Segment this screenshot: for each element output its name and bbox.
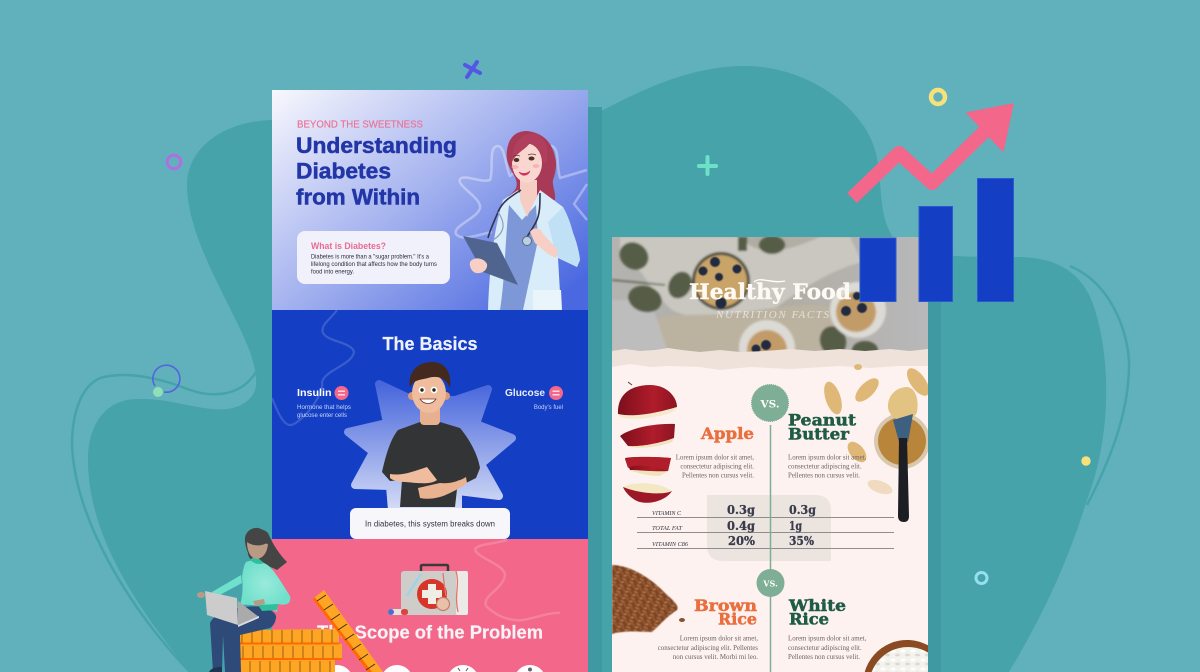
comparison table: 0.3g: [727, 503, 756, 517]
apple description: Lorem ipsum dolor sit amet,: [676, 454, 754, 462]
title: healthy food: Healthy Food: [689, 279, 851, 304]
brown rice heading: Rice: [718, 610, 757, 628]
squiggle: [475, 540, 560, 620]
white rice description: Pellentes non cursus velit.: [788, 654, 860, 661]
comparison table: [637, 495, 894, 561]
comparison table: 20%: [728, 534, 756, 548]
comparison table: 35%: [789, 534, 815, 548]
stat icons row: [324, 665, 543, 672]
what is diabetes box: Diabetes is more than a "sugar problem." It's a: [311, 254, 430, 260]
doctor illustration: [463, 131, 580, 310]
what is diabetes box: food into energy.: [311, 270, 354, 276]
hair back: [245, 529, 287, 570]
comparison table: VITAMIN C: [652, 511, 682, 517]
callout: system breaks down: In diabetes, this system breaks down: [365, 520, 495, 528]
glucose label: Glucose: [505, 387, 545, 399]
heading: the basics: The Basics: [382, 334, 478, 354]
panel: healthy food infographic: [612, 236, 933, 672]
glucose label: Body's fuel: [534, 405, 563, 411]
what is diabetes box: What is Diabetes?: [311, 241, 386, 252]
brown rice heading: Brown: [694, 596, 757, 615]
white rice description: consectetur adipiscing elit.: [788, 645, 862, 652]
apple description: Pellentes non cursus velit.: [682, 472, 754, 480]
coin stack: [237, 629, 342, 672]
what is diabetes box: lifelong condition that affects how the body turns: [311, 262, 437, 268]
vs badge bottom: VS.: [762, 578, 778, 588]
brown rice description: [658, 636, 758, 661]
insulin label: glucose enter cells: [297, 413, 347, 419]
white rice description: [788, 636, 867, 661]
title: healthy food: NUTRITION FACTS: [715, 309, 830, 321]
star burst: [348, 384, 512, 510]
comparison table: TOTAL FAT: [652, 526, 683, 532]
growth bar chart: [860, 178, 1014, 302]
white rice heading: Rice: [789, 610, 829, 628]
squiggle: [272, 310, 354, 425]
apple heading: Apple: [700, 424, 754, 443]
glucose label: [505, 386, 563, 411]
brown rice description: non cursus velit. Morbi mi leo.: [673, 654, 758, 661]
brown rice pile: [612, 565, 685, 634]
title: [296, 136, 456, 205]
legs: [210, 606, 276, 672]
vs badge top: VS.: [759, 398, 780, 410]
apple illustration: [618, 382, 677, 503]
peanut butter bowl and spoon: [874, 387, 930, 522]
section: the basics background: [272, 310, 588, 539]
what is diabetes box: [297, 231, 450, 284]
star outline: [456, 146, 587, 237]
brown rice heading: [694, 599, 757, 625]
hero section background: [272, 90, 588, 310]
trend arrow: [852, 104, 1013, 198]
decorative shapes: [153, 62, 1091, 584]
torn paper edge: [612, 348, 928, 370]
section: scope of the problem background: [272, 539, 588, 672]
panel: diabetes infographic: [272, 90, 588, 672]
peanut butter heading: Peanut: [788, 410, 857, 430]
body background: [612, 364, 928, 672]
callout: system breaks down: [350, 508, 510, 539]
laptop: [205, 591, 259, 627]
insulin label: Hormone that helps: [297, 405, 351, 411]
comparison table: 0.3g: [789, 503, 817, 517]
title: Understanding: [296, 133, 457, 158]
insulin label: Insulin: [297, 387, 332, 399]
ruler: [313, 590, 383, 672]
white rice heading: [788, 596, 846, 628]
white rice heading: White: [788, 596, 846, 615]
peanut butter description: Pellentes non cursus velit.: [788, 472, 860, 480]
insulin label: [297, 386, 351, 419]
peanut butter description: [788, 454, 867, 480]
face: [247, 542, 268, 559]
icon: first aid kit: [388, 565, 468, 615]
title: healthy food: [689, 279, 851, 321]
white rice description: Lorem ipsum dolor sit amet,: [788, 636, 867, 642]
apple description: [676, 454, 754, 480]
brown rice description: consectetur adipiscing elit. Pellentes: [658, 645, 758, 652]
peanut butter heading: Butter: [788, 424, 850, 444]
title: from Within: [296, 184, 420, 210]
peanut illustrations: [821, 364, 933, 497]
header photo: [612, 237, 928, 352]
comparison table: 1g: [789, 519, 802, 533]
comparison table: 0.4g: [727, 519, 756, 533]
eyebrow: BEYOND THE SWEETNESS: [297, 118, 423, 130]
vs badge bottom: [756, 569, 784, 597]
hair front: [245, 528, 270, 544]
man illustration: [382, 362, 480, 507]
heading: the scope of the problem: The Scope of the Problem: [317, 622, 543, 642]
center divider: [770, 425, 772, 672]
brown rice description: Lorem ipsum dolor sit amet,: [680, 636, 758, 642]
peanut butter description: Lorem ipsum dolor sit amet,: [788, 454, 867, 462]
comparison table: VITAMIN C86: [652, 542, 688, 548]
peanut butter description: consectetur adipiscing elit.: [788, 464, 862, 470]
title: Diabetes: [296, 158, 391, 184]
peanut butter heading: [788, 414, 856, 440]
woman with laptop on coins: [197, 528, 383, 672]
vs badge top: [752, 384, 788, 422]
sweater and arm: [240, 560, 290, 612]
apple description: consectetur adipiscing elit.: [680, 464, 754, 470]
white rice bowl: [865, 640, 928, 672]
